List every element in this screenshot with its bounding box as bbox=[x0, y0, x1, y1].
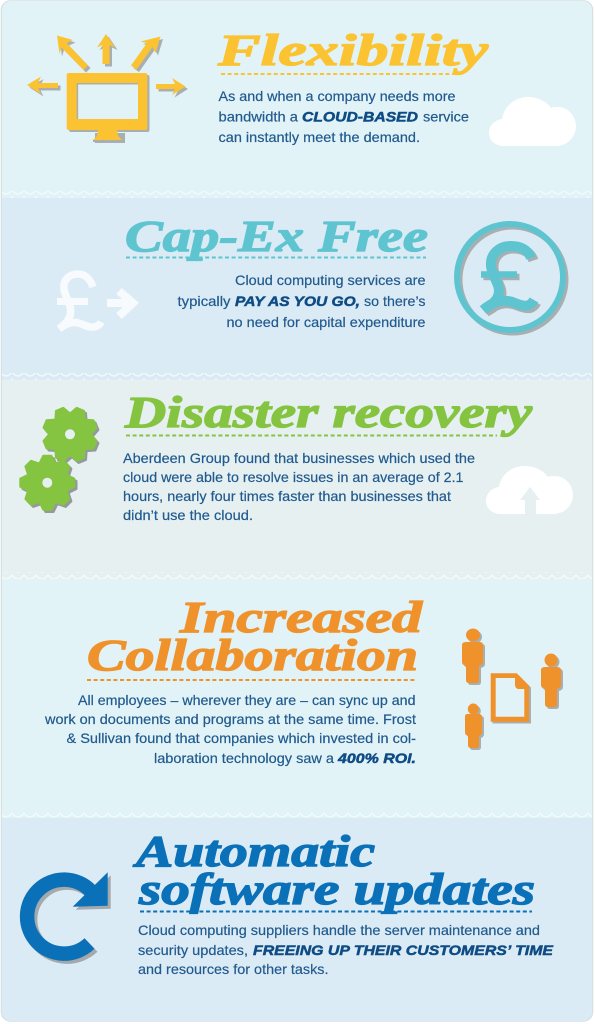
text: collaboration body: work on documents and programs at the same time. Frost bbox=[44, 711, 416, 727]
text: automatic body: and resources for other tasks. bbox=[138, 961, 328, 977]
text: flexibility body: As and when a company needs more bbox=[218, 88, 456, 104]
title: automatic software updates bbox=[132, 827, 535, 914]
panel: flexibility bbox=[2, 1, 592, 198]
title: increased collaboration: Increased bbox=[179, 593, 423, 642]
panel: disaster recovery bbox=[2, 380, 592, 579]
icon: people and document bbox=[462, 628, 563, 750]
text: automatic body bbox=[138, 922, 554, 977]
panel: increased collaboration bbox=[2, 579, 592, 818]
text: collaboration body: 400% ROI. bbox=[337, 750, 416, 766]
title: flexibility: Flexibility bbox=[217, 26, 489, 75]
icon: upload cloud bbox=[486, 466, 573, 514]
text: disaster body: Aberdeen Group found that businesses which used the bbox=[123, 450, 475, 466]
text: collaboration body: laboration technology saw a bbox=[154, 750, 334, 766]
icon: pound coin bbox=[457, 224, 566, 332]
title: increased collaboration bbox=[87, 593, 423, 680]
text: automatic body: security updates, bbox=[138, 942, 248, 958]
icon: monitor with arrows bbox=[27, 34, 188, 143]
text: disaster body: didn’t use the cloud. bbox=[123, 507, 253, 523]
text: disaster body: cloud were able to resolve issues in an average of 2.1 bbox=[123, 469, 464, 485]
panel: automatic software updates bbox=[2, 818, 592, 1022]
scallop dividers bbox=[2, 191, 592, 818]
text: cap-ex body: PAY AS YOU GO, bbox=[235, 293, 360, 309]
text: flexibility body: can instantly meet the demand. bbox=[218, 129, 420, 145]
text: collaboration body bbox=[44, 692, 416, 766]
icon: cloud bbox=[489, 97, 576, 146]
icon: gears bbox=[19, 406, 100, 513]
text: flexibility body: CLOUD-BASED bbox=[302, 108, 418, 124]
text: automatic body: FREEING UP THEIR CUSTOMERS’ TIME bbox=[253, 942, 554, 958]
icon: white pound and arrow bbox=[57, 274, 133, 329]
text: flexibility body: service bbox=[423, 108, 469, 124]
text: cap-ex body: Cloud computing services are bbox=[235, 272, 426, 288]
text: flexibility body bbox=[218, 88, 469, 145]
text: cap-ex body: so there’s bbox=[364, 293, 426, 309]
text: disaster body: hours, nearly four times faster than businesses that bbox=[123, 488, 451, 504]
title: disaster recovery: Disaster recovery bbox=[124, 388, 533, 437]
text: cap-ex body bbox=[178, 272, 426, 330]
panel: cap-ex free bbox=[2, 198, 592, 380]
title: automatic software updates: Automatic bbox=[132, 827, 375, 876]
title: increased collaboration: Collaboration bbox=[87, 631, 418, 680]
icon: refresh arrow bbox=[27, 872, 111, 957]
text: disaster body bbox=[123, 450, 475, 523]
title: automatic software updates: software updates bbox=[138, 865, 535, 914]
text: collaboration body: All employees – wherever they are – can sync up and bbox=[78, 692, 416, 708]
text: collaboration body: & Sullivan found that companies which invested in col- bbox=[66, 730, 416, 746]
text: flexibility body: bandwidth a bbox=[218, 108, 298, 124]
text: automatic body: Cloud computing suppliers handle the server maintenance and bbox=[138, 922, 540, 938]
text: cap-ex body: typically bbox=[178, 293, 230, 309]
text: cap-ex body: no need for capital expenditure bbox=[226, 314, 426, 330]
title: cap-ex free: Cap-Ex Free bbox=[125, 212, 428, 261]
